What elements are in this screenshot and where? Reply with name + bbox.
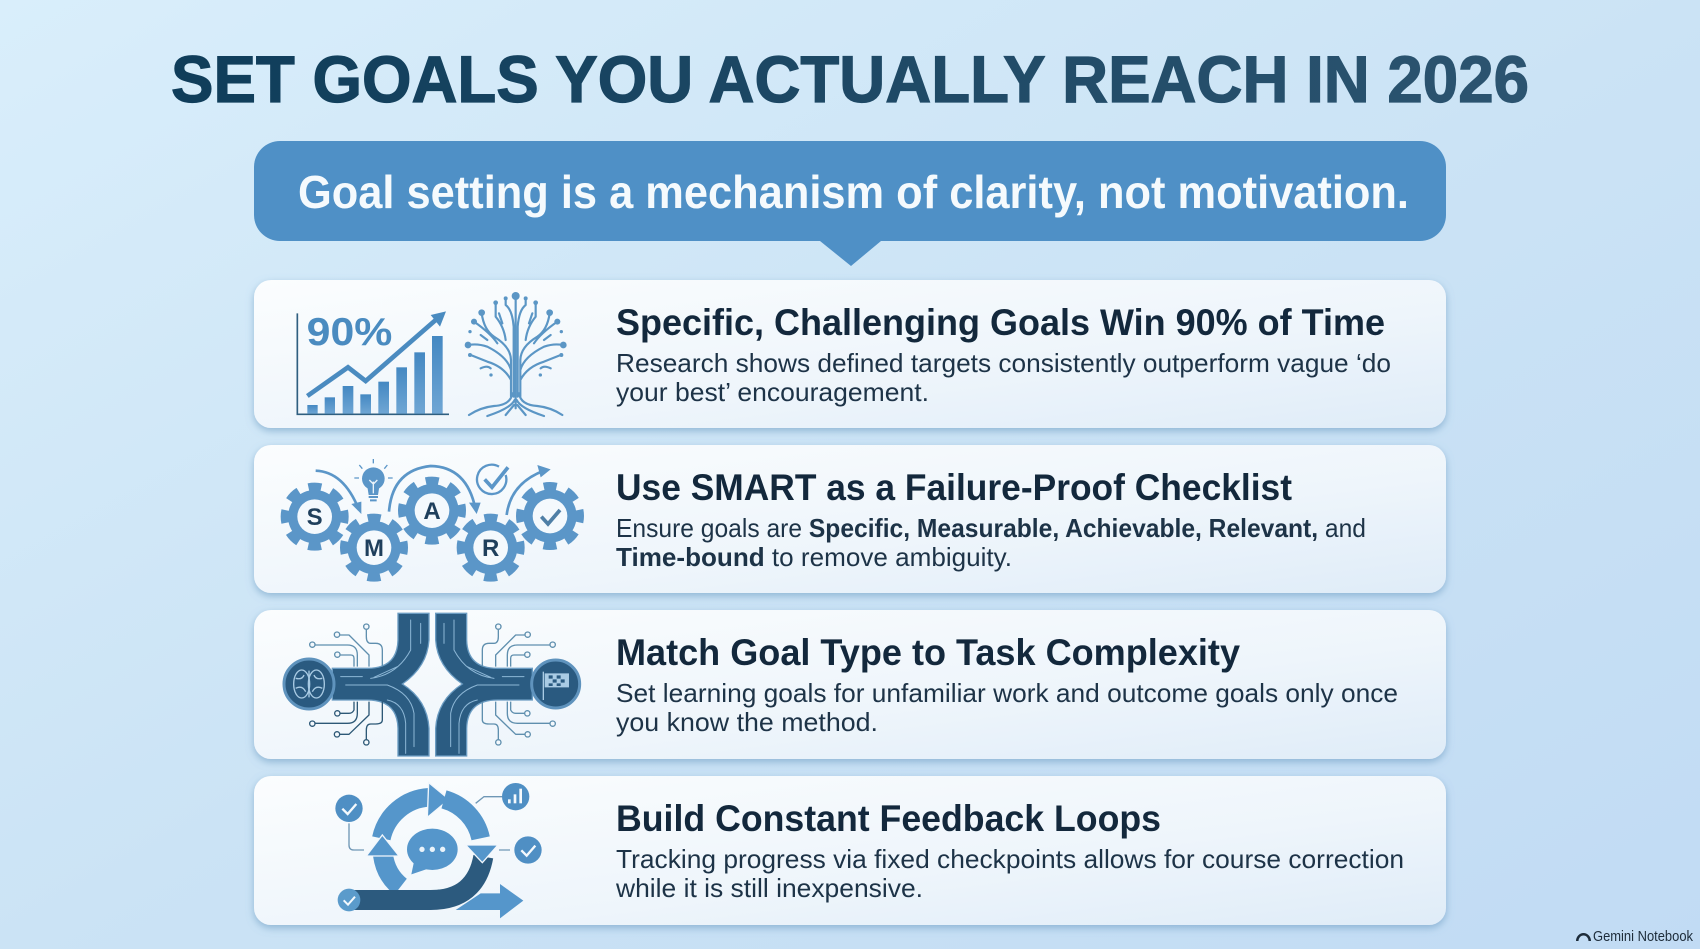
icon: checkered flag	[543, 672, 569, 700]
icon: gear A	[403, 481, 461, 540]
icon: gear S: S	[307, 504, 323, 531]
text block: Research shows defined targets consistently outperform vague ‘do	[616, 348, 1391, 378]
heading: Use SMART as a Failure-Proof Checklist	[616, 467, 1292, 508]
right road	[436, 613, 580, 756]
callout banner	[254, 141, 1446, 266]
heading: Match Goal Type to Task Complexity	[616, 632, 1240, 673]
left road	[284, 613, 429, 756]
text block: Set learning goals for unfamiliar work and outcome goals only once	[616, 678, 1398, 708]
text block	[616, 513, 1366, 572]
icon: gear A: A	[423, 498, 441, 525]
icon: feedback loop	[335, 783, 542, 918]
heading: Specific, Challenging Goals Win 90% of Time	[616, 302, 1385, 343]
icon: gear M	[345, 518, 403, 577]
icon: circuit tree	[465, 292, 567, 416]
icon: light bulb	[354, 459, 393, 500]
heading: Build Constant Feedback Loops	[616, 798, 1161, 839]
text block: Tracking progress via fixed checkpoints allows for course correction	[616, 844, 1404, 874]
panel: feedback loops	[254, 776, 1446, 925]
text block: Ensure goals are Specific, Measurable, Achievable, Relevant, and	[616, 513, 1366, 543]
icon: speech bubble	[407, 829, 458, 874]
text block: your best’ encouragement.	[616, 377, 929, 407]
title: SET GOALS YOU ACTUALLY REACH IN 2026	[171, 42, 1529, 116]
panel: goal type	[254, 610, 1446, 759]
icon: check badges	[335, 795, 542, 911]
text block	[616, 678, 1398, 737]
icon: gear S	[285, 487, 344, 546]
text block: while it is still inexpensive.	[615, 873, 923, 903]
text block	[616, 348, 1391, 407]
icon: gear R	[461, 518, 520, 577]
icon: check circle	[477, 465, 508, 494]
icon: gear check	[521, 487, 579, 545]
text block: you know the method.	[616, 707, 878, 737]
text block: Time-bound to remove ambiguity.	[616, 542, 1012, 572]
icon: chart badge	[502, 783, 529, 810]
panel: SMART checklist	[254, 445, 1446, 593]
text block	[615, 844, 1404, 903]
panel: specific goals	[254, 280, 1446, 428]
icon: gear R: R	[482, 535, 499, 562]
callout banner: Goal setting is a mechanism of clarity, not motivation.	[298, 166, 1409, 218]
icon: rising bar chart with 90%	[297, 310, 449, 414]
icon: forked roads with brain and flag	[284, 613, 580, 756]
icon: SMART gears	[285, 459, 579, 577]
icon: brain	[294, 670, 324, 698]
icon: rising bar chart with 90%: 90%	[307, 310, 392, 354]
icon: gear M: M	[364, 535, 384, 562]
